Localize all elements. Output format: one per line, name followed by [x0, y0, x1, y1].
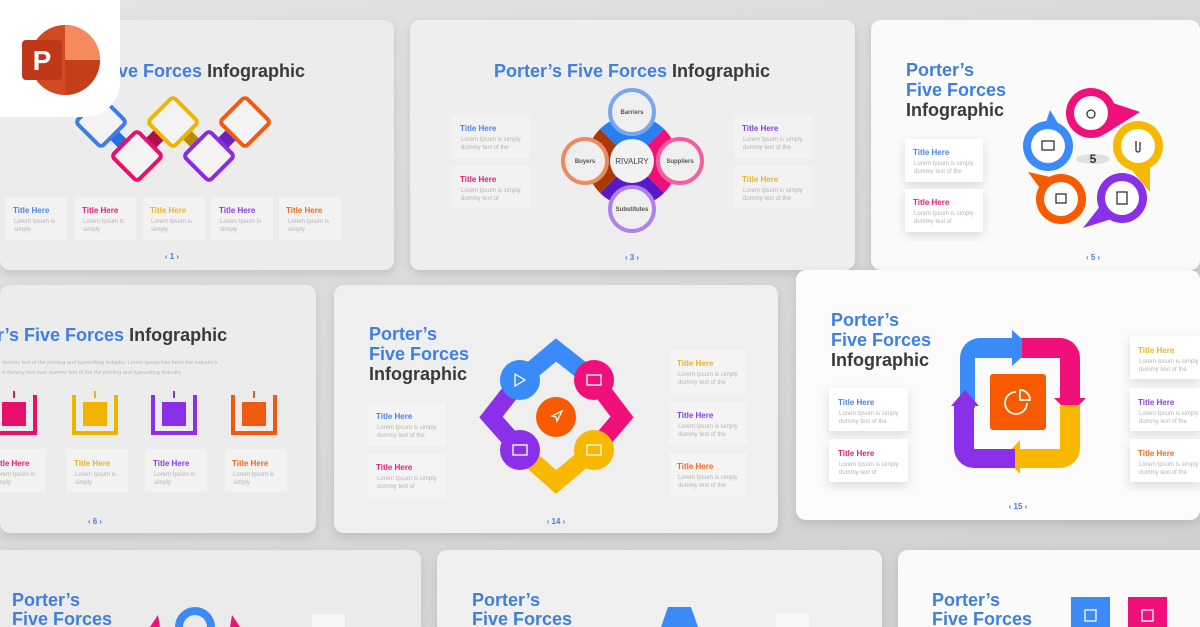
- text boxes slide 15: [829, 336, 1200, 482]
- text boxes slide 3: dummy text of the: [743, 145, 791, 151]
- text boxes slide 5: Title Here: [913, 148, 950, 157]
- text boxes slide 3: dummy text of: [461, 196, 499, 202]
- slide card 14: rounded diamond: ‹ 14 ›: [547, 517, 566, 526]
- title slide 5: Porter’s: [906, 60, 974, 80]
- text boxes slide 3: Lorem Ipsum is simply: [461, 188, 521, 194]
- text boxes slide 14: Lorem Ipsum is simply: [678, 372, 738, 378]
- text boxes slide 1: simply: [220, 227, 237, 233]
- slide card 14: rounded diamond: Five Forces: [369, 344, 469, 364]
- text boxes slide 15: Title Here: [838, 449, 875, 458]
- text boxes slide 14: dummy text of the: [678, 380, 726, 386]
- pentagon diagram: 5: [1090, 152, 1097, 166]
- text boxes slide 5: Lorem Ipsum is simply: [914, 211, 974, 217]
- pentagon diagram: [1023, 88, 1163, 228]
- text boxes slide 3: dummy text of the: [743, 196, 791, 202]
- text boxes slide 15: Lorem Ipsum is simply: [839, 462, 899, 468]
- rivalry diagram: Barriers: [620, 110, 644, 116]
- rivalry diagram: [563, 90, 702, 231]
- text boxes slide 14: dummy text of the: [678, 432, 726, 438]
- text boxes slide 6: Title Here: [74, 459, 111, 468]
- text boxes slide 15: Lorem Ipsum is simply: [1139, 411, 1199, 417]
- text boxes slide 14: Title Here: [677, 411, 714, 420]
- text boxes slide 6: Lorem Ipsum is: [75, 472, 116, 478]
- text boxes slide 1: Title Here: [82, 206, 119, 215]
- text boxes slide 14: dummy text of: [377, 484, 415, 490]
- slide card 5: pentagon: Infographic: [906, 100, 1004, 120]
- slide card 3: rivalry: ‹ 3 ›: [625, 253, 639, 262]
- text boxes slide 6: Title Here: [153, 459, 190, 468]
- title slide 14: Porter’s: [369, 324, 437, 344]
- text boxes slide 15: dummy text of: [839, 470, 877, 476]
- slide card bottom middle: [437, 550, 882, 627]
- text boxes slide 6: Lorem Ipsum is: [233, 472, 274, 478]
- slide card 5: pentagon: ‹ 5 ›: [1086, 253, 1100, 262]
- text boxes slide 1: simply: [151, 227, 168, 233]
- text boxes slide 14: Lorem Ipsum is simply: [377, 476, 437, 482]
- slide card bottom left: [0, 550, 421, 627]
- text boxes slide 3: Title Here: [460, 124, 497, 133]
- text boxes slide 15: Lorem Ipsum is simply: [1139, 462, 1199, 468]
- slide card bottom right: Porter’s: [932, 590, 1000, 610]
- PowerPoint logo badge: P: [33, 45, 51, 76]
- slide card 5: pentagon: [871, 20, 1200, 270]
- text boxes slide 5: dummy text of the: [914, 169, 962, 175]
- text boxes slide 1: Lorem Ipsum is: [288, 219, 329, 225]
- rivalry diagram: RIVALRY: [615, 157, 649, 166]
- slide card 6: box icons: d dummy text ever dummy text of the the printing and typesetting industry.: [2, 370, 182, 376]
- text boxes slide 15: Title Here: [1138, 449, 1175, 458]
- PowerPoint logo badge: [0, 0, 120, 117]
- text boxes slide 6: simply: [75, 480, 92, 486]
- text boxes slide 15: dummy text of the: [1139, 470, 1187, 476]
- text boxes slide 6: simply: [233, 480, 250, 486]
- title slide 15: Porter’s: [831, 310, 899, 330]
- slide card 1: diamond icons: ‹ 1 ›: [165, 252, 179, 261]
- box icons: [0, 391, 275, 433]
- slide card 14: rounded diamond: [334, 285, 778, 533]
- text boxes slide 1: Lorem Ipsum is: [220, 219, 261, 225]
- text boxes slide 1: Title Here: [13, 206, 50, 215]
- text boxes slide 14: Title Here: [376, 463, 413, 472]
- text boxes slide 1: Lorem Ipsum is: [14, 219, 55, 225]
- diamond chain: [76, 97, 270, 181]
- text boxes slide 1: simply: [83, 227, 100, 233]
- text boxes slide 15: Title Here: [1138, 346, 1175, 355]
- text boxes slide 15: Title Here: [838, 398, 875, 407]
- slide card 5: pentagon: Five Forces: [906, 80, 1006, 100]
- text boxes slide 15: Lorem Ipsum is simply: [839, 411, 899, 417]
- text boxes slide 3: Title Here: [742, 124, 779, 133]
- slide card 15: square arrows: [796, 270, 1200, 520]
- text boxes slide 1: Title Here: [219, 206, 256, 215]
- square arrow cycle: [951, 330, 1086, 474]
- text boxes slide 14: [368, 350, 747, 497]
- text boxes slide 3: Lorem Ipsum is simply: [461, 137, 521, 143]
- text boxes slide 6: Lorem Ipsum is: [154, 472, 195, 478]
- text boxes slide 3: dummy text of the: [461, 145, 509, 151]
- slide card bottom middle: Porter’s: [472, 590, 540, 610]
- text boxes slide 14: Lorem Ipsum is simply: [377, 425, 437, 431]
- slide card 15: square arrows: Five Forces: [831, 330, 931, 350]
- text boxes slide 15: dummy text of the: [839, 419, 887, 425]
- text boxes slide 14: Title Here: [677, 462, 714, 471]
- text boxes slide 1: [5, 197, 341, 240]
- text boxes slide 5: [905, 139, 983, 232]
- slide card 1: diamond icons: [0, 20, 394, 270]
- slide card bottom left: Porter’s: [12, 590, 80, 610]
- slide card bottom right: [898, 550, 1200, 627]
- slide card 6: box icons: ‹ 6 ›: [88, 517, 102, 526]
- text boxes slide 14: Title Here: [376, 412, 413, 421]
- rivalry diagram: Buyers: [575, 159, 596, 165]
- PowerPoint P tile: [22, 40, 62, 80]
- subtitle slide 6: dummy text of the printing and typesetting industry. Lorem Ipsum has been the industry's: [2, 360, 218, 366]
- text boxes slide 14: Lorem Ipsum is simply: [678, 475, 738, 481]
- text boxes slide 15: Lorem Ipsum is simply: [1139, 359, 1199, 365]
- text boxes slide 5: Lorem Ipsum is simply: [914, 161, 974, 167]
- text boxes slide 3: Title Here: [460, 175, 497, 184]
- text boxes slide 15: Title Here: [1138, 398, 1175, 407]
- text boxes slide 6: [0, 449, 287, 492]
- text boxes slide 1: simply: [288, 227, 305, 233]
- text boxes slide 1: Title Here: [286, 206, 323, 215]
- text boxes slide 5: Title Here: [913, 198, 950, 207]
- text boxes slide 1: Lorem Ipsum is: [151, 219, 192, 225]
- slide card 3: rivalry: [410, 20, 855, 270]
- text boxes slide 14: dummy text of the: [678, 483, 726, 489]
- text boxes slide 1: Lorem Ipsum is: [83, 219, 124, 225]
- text boxes slide 14: Title Here: [677, 359, 714, 368]
- rivalry diagram: Substitutes: [616, 207, 649, 213]
- title slide 6: r’s Five Forces Infographic: [0, 325, 227, 345]
- rivalry diagram: Suppliers: [666, 159, 694, 165]
- text boxes slide 6: simply: [154, 480, 171, 486]
- text boxes slide 3: [452, 115, 812, 209]
- text boxes slide 6: Title Here: [232, 459, 269, 468]
- text boxes slide 3: Title Here: [742, 175, 779, 184]
- diamond diagram: [491, 350, 622, 482]
- text boxes slide 14: Lorem Ipsum is simply: [678, 424, 738, 430]
- text boxes slide 15: dummy text of the: [1139, 367, 1187, 373]
- title slide 1: ive Forces Infographic: [113, 61, 305, 81]
- slide card 15: square arrows: Infographic: [831, 350, 929, 370]
- text boxes slide 3: Lorem Ipsum is simply: [743, 137, 803, 143]
- title slide 3: Porter’s Five Forces Infographic: [494, 61, 770, 81]
- slide card 14: rounded diamond: Infographic: [369, 364, 467, 384]
- text boxes slide 1: Title Here: [150, 206, 187, 215]
- slide card 6: box icons: [0, 285, 316, 533]
- text boxes slide 5: dummy text of: [914, 219, 952, 225]
- text boxes slide 1: simply: [14, 227, 31, 233]
- text boxes slide 3: Lorem Ipsum is simply: [743, 188, 803, 194]
- slide card 15: square arrows: ‹ 15 ›: [1009, 502, 1028, 511]
- text boxes slide 14: dummy text of the: [377, 433, 425, 439]
- text boxes slide 15: dummy text of the: [1139, 419, 1187, 425]
